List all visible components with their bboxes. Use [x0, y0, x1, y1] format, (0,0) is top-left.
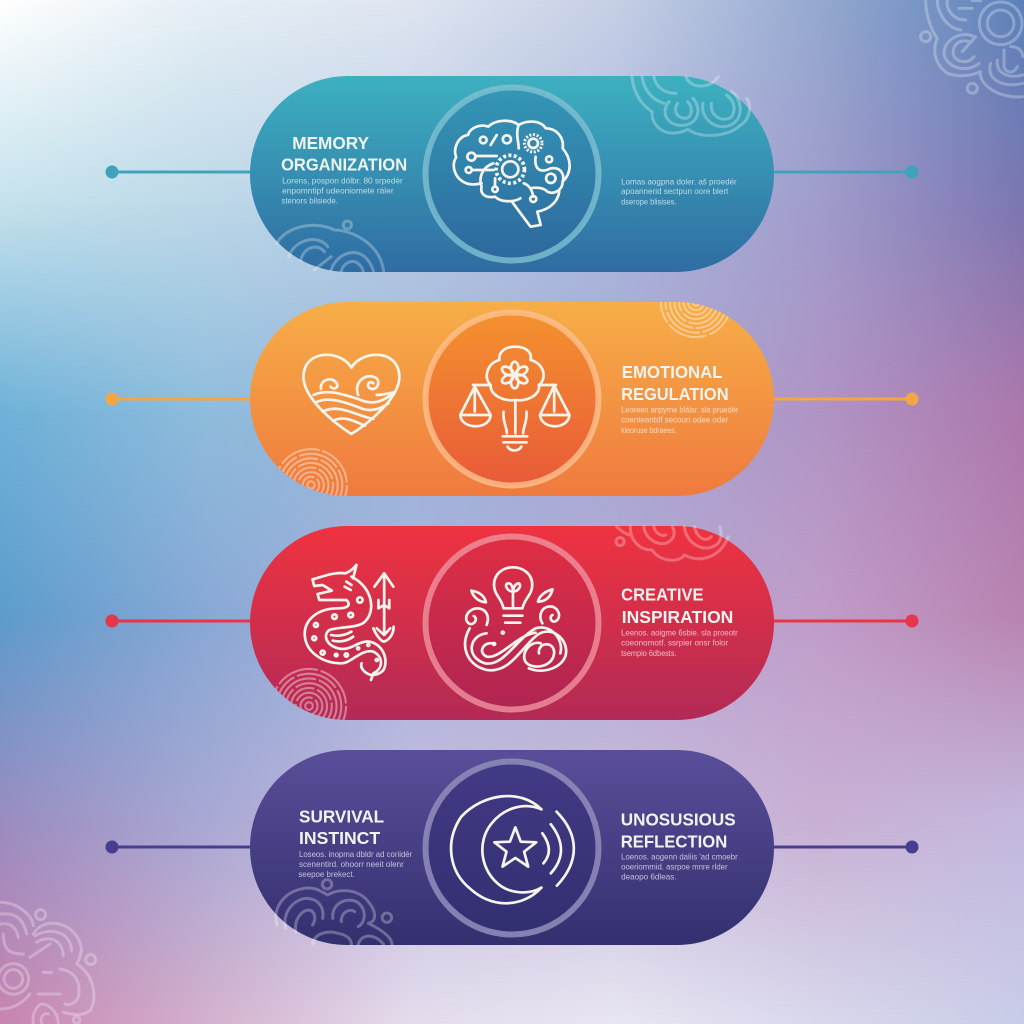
heading: creative inspiration: INSPIRATION [622, 607, 733, 627]
text block: Leenos. aoigme 6sbie. sla proeotr [621, 627, 738, 637]
connector: row 1 [106, 166, 918, 178]
text block: left [298, 849, 412, 879]
icon: bulb with swirl [465, 567, 566, 671]
text block: left: stenors bilsiede. [281, 195, 338, 205]
pattern: knots [277, 77, 750, 271]
text block: coeonomotf. ssrpier onsr folor [621, 638, 728, 648]
text block: tsempio 6dbests. [621, 648, 677, 658]
text block: left [281, 175, 403, 205]
connector: row 3 [106, 614, 918, 628]
pattern: fingerprints [278, 302, 729, 496]
text block [621, 404, 739, 435]
connector: row 4 [106, 840, 918, 854]
heading: emotional regulation: EMOTIONAL [622, 362, 723, 382]
text block: left: scenentird. ohoorr neeit olenr [299, 859, 404, 869]
heading: survival instinct: SURVIVAL [299, 807, 384, 827]
connector: row 2 [106, 392, 918, 406]
text block: right: dserope blisises. [621, 196, 677, 206]
heading: unosusious reflection: UNOSUSIOUS [621, 809, 736, 829]
icon: scales with flower and bulb [460, 347, 569, 450]
text block: Leoreen anpyme blálsr. sla pruedér [621, 404, 739, 414]
heading: memory organization [281, 133, 407, 175]
heading: unosusious reflection [621, 809, 736, 851]
center ring [426, 88, 598, 260]
text block: left: Loseos. inopma dbldr ad coriidér [299, 849, 412, 859]
pattern: knot [616, 527, 728, 560]
text block: right [621, 851, 738, 882]
heading: creative inspiration: CREATIVE [621, 584, 704, 604]
center ring [426, 312, 598, 486]
text block: coenteantdf secoun odee oder [621, 415, 728, 425]
corner ornament: bottom left [0, 902, 96, 1023]
text block: kleoruse bdraees. [621, 425, 677, 435]
heading: memory organization: ORGANIZATION [281, 155, 407, 175]
text block: right: Lomas aogpna doler. aš proedér [621, 176, 737, 186]
heading: emotional regulation [621, 362, 729, 404]
icon: dragon and arrow [305, 565, 394, 680]
icon: crescent moon and star [451, 796, 574, 903]
text block: right: ooeriommid. asrpoe mnre rlder [621, 861, 728, 871]
text block: right: Loenos. aogenn daliis 'ad cmoebr [621, 851, 738, 861]
text block: right [621, 176, 737, 206]
text block: right: deaopo 6dleas. [621, 872, 677, 882]
center ring [426, 536, 598, 710]
text block: right: apoannerid sectpun oore blert [621, 186, 729, 196]
icon: heart with waves [303, 355, 399, 434]
heading: creative inspiration [621, 584, 733, 627]
panel: creative inspiration [250, 525, 774, 720]
heading: unosusious reflection: REFLECTION [621, 831, 727, 851]
icon: brain with gears [454, 121, 570, 227]
pattern: knot [276, 880, 392, 944]
panel: memory organization [250, 76, 774, 272]
text block [621, 627, 738, 658]
corner ornament: top right [921, 1, 1023, 97]
heading: emotional regulation: REGULATION [621, 384, 729, 404]
panel: emotional regulation [250, 302, 774, 496]
center ring [426, 762, 598, 934]
text block: left: seepoe brekect. [298, 869, 355, 879]
heading: survival instinct [299, 807, 384, 848]
panel: survival instinct and reflection [250, 750, 774, 945]
pattern: fingerprint [276, 668, 348, 720]
heading: memory organization: MEMORY [292, 133, 369, 153]
heading: survival instinct: INSTINCT [299, 828, 380, 848]
text block: left: Lorens, pospon dólbr. 80 srpedér [282, 175, 403, 185]
text block: left: enpomntipf udeoniomete ráler [282, 185, 394, 195]
